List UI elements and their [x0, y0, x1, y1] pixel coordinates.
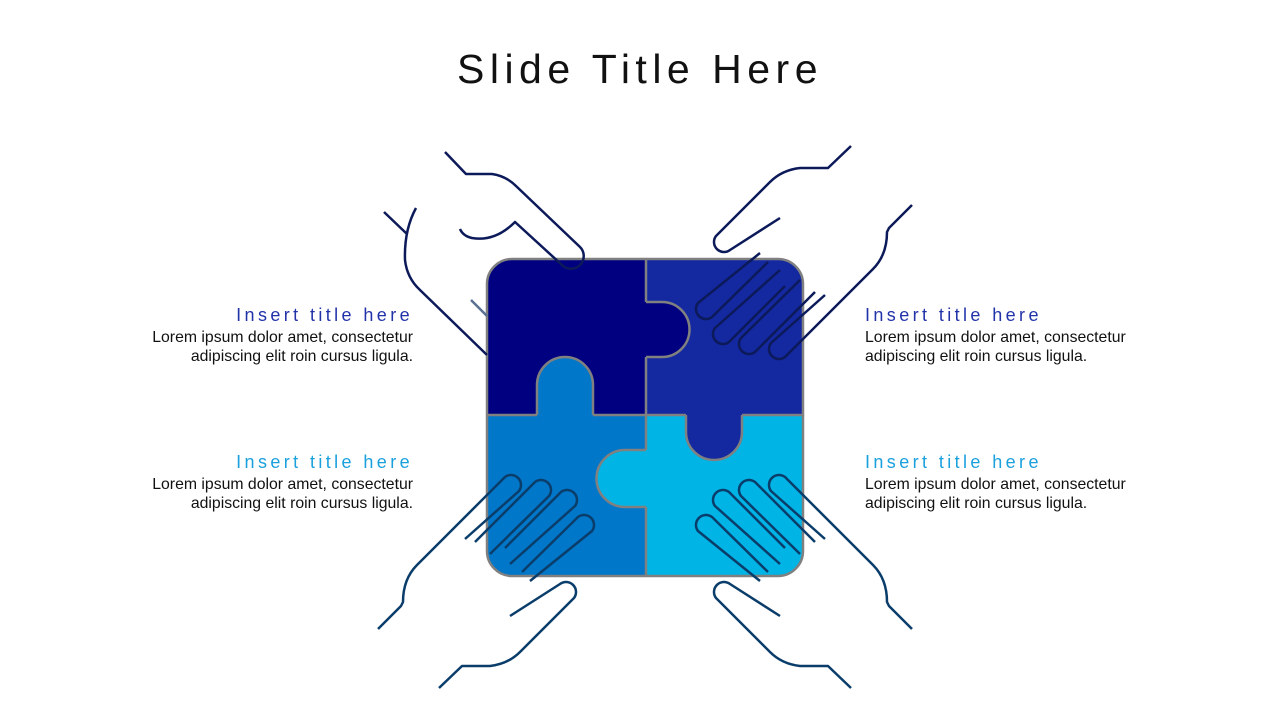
text: bottom left: [152, 452, 413, 512]
text: top right: Insert title here: [865, 305, 1042, 325]
text: bottom left: Lorem ipsum dolor amet, consectetur: [152, 476, 413, 493]
text: top left: adipiscing elit roin cursus ligula.: [191, 348, 413, 365]
text: top left: [152, 305, 413, 365]
title: Slide Title Here: [457, 46, 823, 92]
text: top left: Lorem ipsum dolor amet, consectetur: [152, 329, 413, 346]
hand: bottom left: [378, 475, 594, 688]
text: top left: Insert title here: [236, 305, 413, 325]
text: bottom left: adipiscing elit roin cursus ligula.: [191, 495, 413, 512]
hand: top right: [696, 146, 912, 359]
puzzle graphic with hands: [377, 145, 913, 689]
puzzle: [487, 259, 803, 576]
text: top right: Lorem ipsum dolor amet, consectetur: [865, 329, 1126, 346]
text: bottom right: Lorem ipsum dolor amet, consectetur: [865, 476, 1126, 493]
text: bottom right: [865, 452, 1126, 512]
text: bottom left: Insert title here: [236, 452, 413, 472]
text: bottom right: Insert title here: [865, 452, 1042, 472]
hand: bottom right: [696, 475, 912, 688]
text: bottom right: adipiscing elit roin cursus ligula.: [865, 495, 1087, 512]
text: top right: [865, 305, 1126, 365]
text: top right: adipiscing elit roin cursus ligula.: [865, 348, 1087, 365]
hand: top left: [384, 152, 584, 355]
